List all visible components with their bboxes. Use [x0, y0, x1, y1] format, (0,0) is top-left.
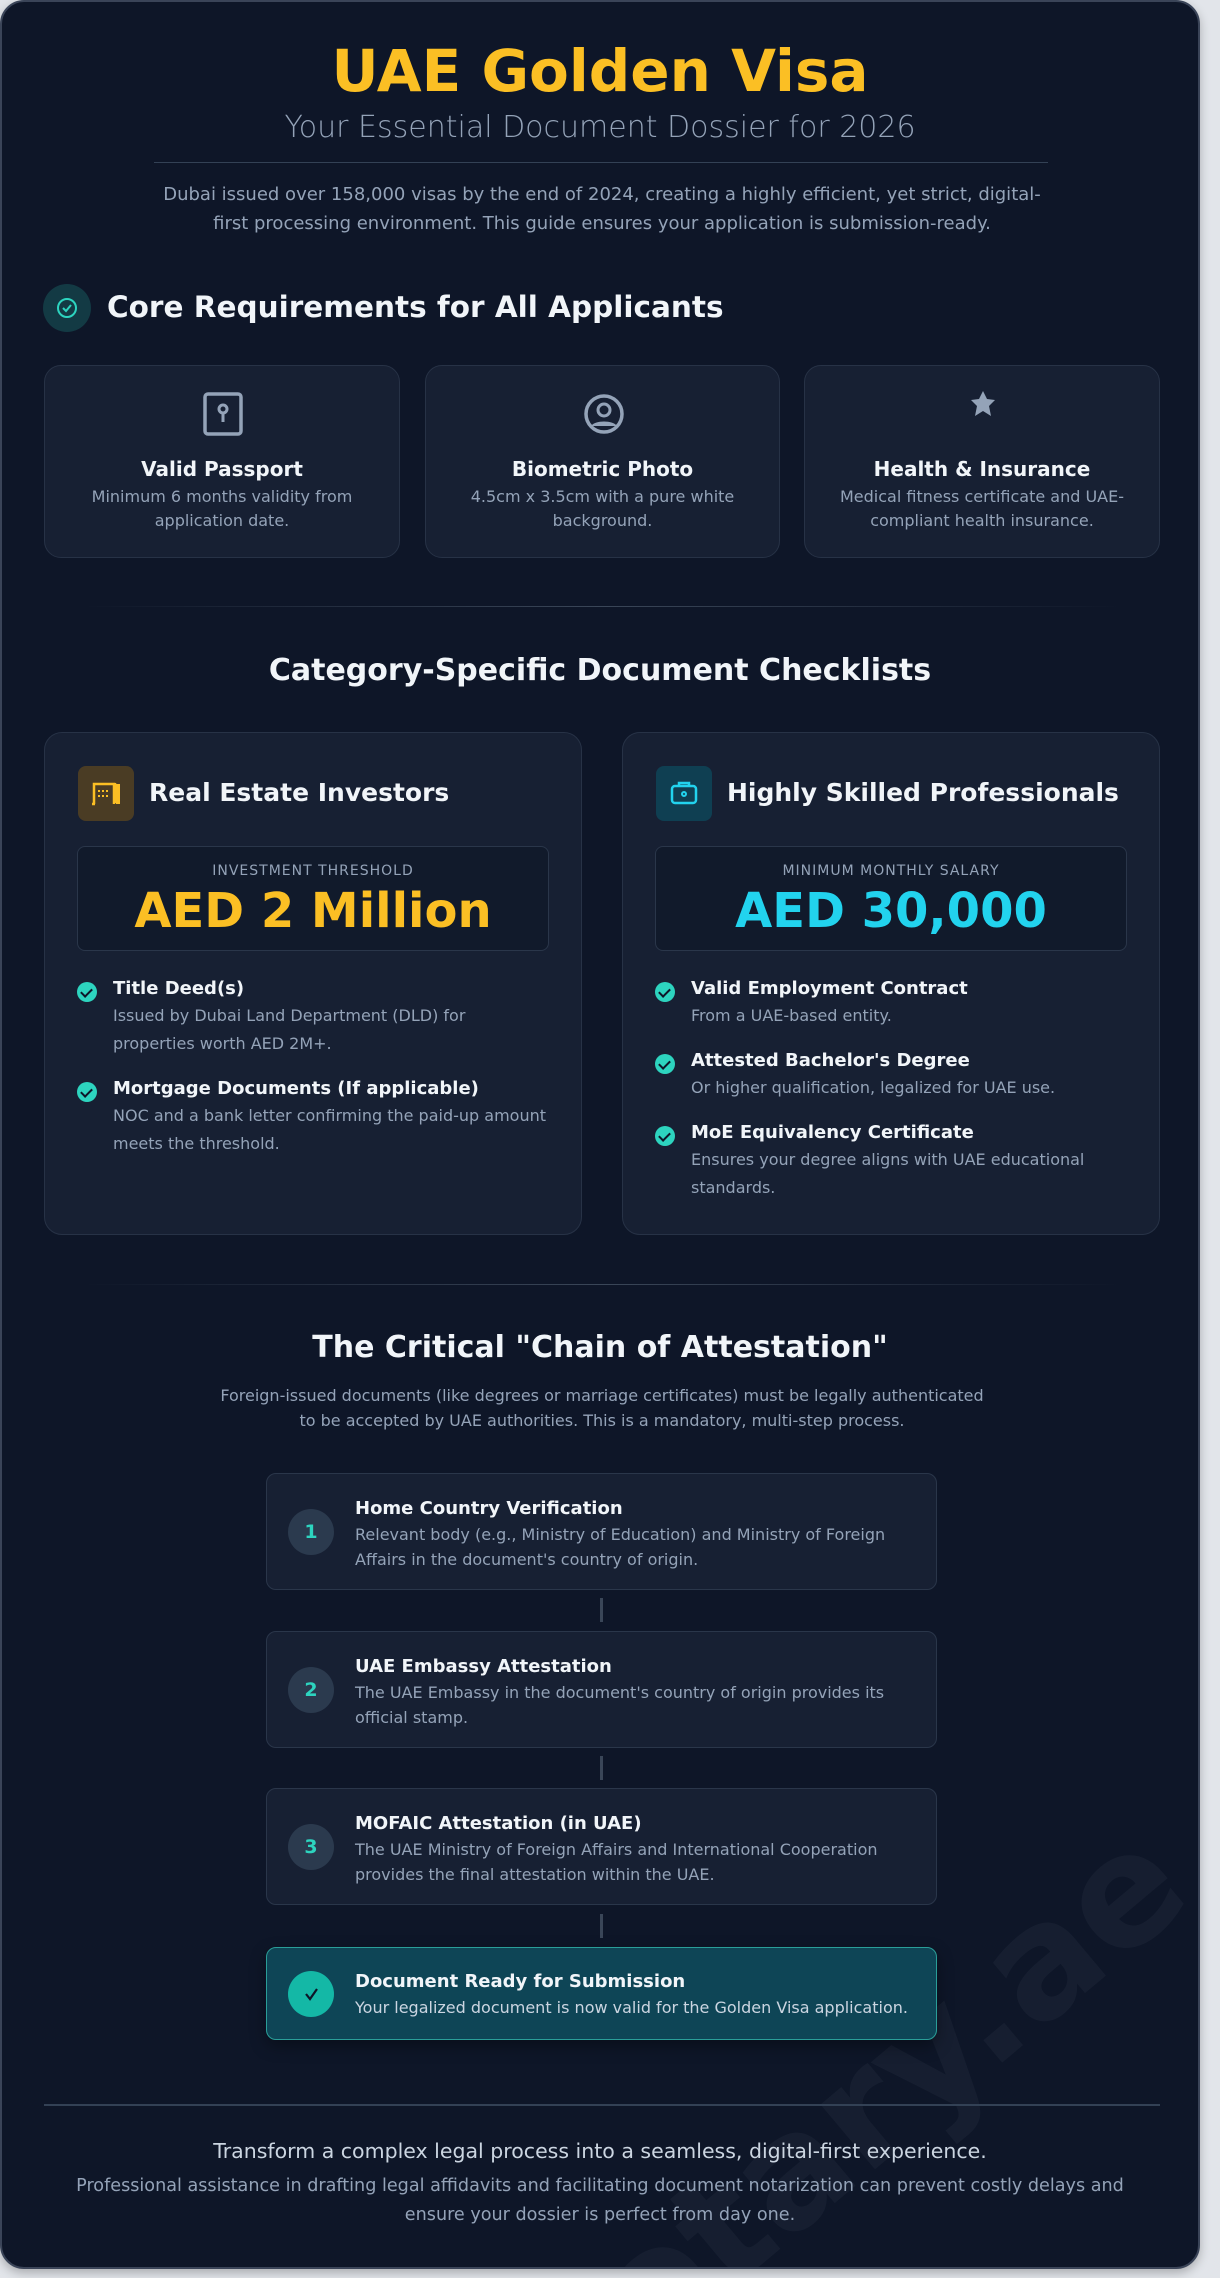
- item: [655, 978, 968, 1025]
- card: photo: [425, 365, 780, 558]
- heading: chain of attestation: The Critical "Chain of Attestation": [312, 1330, 888, 1365]
- salary box: MINIMUM MONTHLY SALARY: [782, 863, 1000, 879]
- salary box: [655, 846, 1127, 951]
- item: Mortgage Documents (If applicable): [113, 1078, 479, 1099]
- item: [655, 1050, 1055, 1097]
- heading: core requirements: Core Requirements for All Applicants: [107, 290, 724, 324]
- icon: check circle: [43, 284, 91, 332]
- item: Attested Bachelor's Degree: [691, 1050, 970, 1071]
- threshold box: INVESTMENT THRESHOLD: [212, 863, 414, 879]
- panel: professionals: [622, 732, 1160, 1235]
- step 1: Home Country Verification: [355, 1498, 623, 1519]
- icon: star: [971, 391, 995, 416]
- threshold box: [77, 846, 549, 951]
- icon: user circle: [584, 394, 624, 434]
- card: passport: [44, 365, 400, 558]
- intro: attestation: Foreign-issued documents (like degrees or marriage certificates) must be legally authenticated to be accepted by UAE authorities. This is a mandatory, multi-step process.: [220, 1386, 984, 1430]
- final step: ready: Document Ready for Submission: [355, 1971, 685, 1992]
- item: [77, 978, 466, 1053]
- step 2: [266, 1631, 937, 1748]
- item: NOC and a bank letter confirming the paid-up amount meets the threshold.: [113, 1106, 546, 1153]
- heading: core requirements: [43, 284, 724, 332]
- card: health: Medical fitness certificate and UAE-compliant health insurance.: [840, 487, 1124, 530]
- item: [655, 1122, 1084, 1197]
- item: Issued by Dubai Land Department (DLD) for properties worth AED 2M+.: [113, 1006, 465, 1053]
- salary box: AED 30,000: [735, 883, 1047, 939]
- intro text: Dubai issued over 158,000 visas by the end of 2024, creating a highly efficient, yet strict, digital-first processing environment. This guide ensures your application is submission-ready.: [163, 184, 1041, 234]
- footer text: Professional assistance in drafting legal affidavits and facilitating document notarization can prevent costly delays and ensure your dossier is perfect from day one.: [76, 2176, 1124, 2225]
- step 3: [266, 1788, 937, 1905]
- item: [77, 1078, 546, 1153]
- icon: check: [288, 1971, 334, 2017]
- item: Valid Employment Contract: [691, 978, 968, 999]
- step 1: [266, 1473, 937, 1590]
- heading: checklists: Category-Specific Document Checklists: [269, 653, 931, 688]
- footer tagline: Transform a complex legal process into a seamless, digital-first experience.: [213, 2139, 987, 2163]
- card: photo: Biometric Photo: [512, 457, 693, 481]
- item: MoE Equivalency Certificate: [691, 1122, 974, 1143]
- card: health: Health & Insurance: [874, 457, 1090, 481]
- subtitle: Your Essential Document Dossier for 2026: [284, 110, 916, 145]
- item: Title Deed(s): [113, 978, 244, 999]
- card: photo: 4.5cm x 3.5cm with a pure white background.: [471, 487, 734, 530]
- icon: passport: [203, 392, 243, 436]
- item: Or higher qualification, legalized for UAE use.: [691, 1078, 1055, 1097]
- step 2: The UAE Embassy in the document's country of origin provides its official stamp.: [355, 1683, 884, 1727]
- item: Ensures your degree aligns with UAE educational standards.: [691, 1150, 1084, 1197]
- final step: ready: Your legalized document is now valid for the Golden Visa application.: [355, 1998, 908, 2017]
- step 2: UAE Embassy Attestation: [355, 1656, 612, 1677]
- card: health: [804, 365, 1160, 558]
- step 1: Relevant body (e.g., Ministry of Education) and Ministry of Foreign Affairs in the document's country of origin.: [355, 1525, 885, 1569]
- step 3: MOFAIC Attestation (in UAE): [355, 1813, 642, 1834]
- step 1: 1: [304, 1521, 318, 1543]
- final step: ready: [266, 1947, 937, 2040]
- step 3: 3: [304, 1836, 318, 1858]
- item: From a UAE-based entity.: [691, 1006, 892, 1025]
- icon: building: [78, 766, 134, 821]
- panel: real estate: [44, 732, 582, 1235]
- title: UAE Golden Visa: [331, 37, 869, 105]
- card: passport: Minimum 6 months validity from application date.: [92, 487, 352, 530]
- panel: real estate: Real Estate Investors: [149, 778, 449, 807]
- icon: briefcase: [656, 766, 712, 821]
- panel: professionals: Highly Skilled Professionals: [727, 778, 1119, 807]
- step 2: 2: [304, 1679, 318, 1701]
- step 3: The UAE Ministry of Foreign Affairs and International Cooperation provides the final attestation within the UAE.: [355, 1840, 878, 1884]
- threshold box: AED 2 Million: [134, 883, 492, 939]
- card: passport: Valid Passport: [141, 457, 303, 481]
